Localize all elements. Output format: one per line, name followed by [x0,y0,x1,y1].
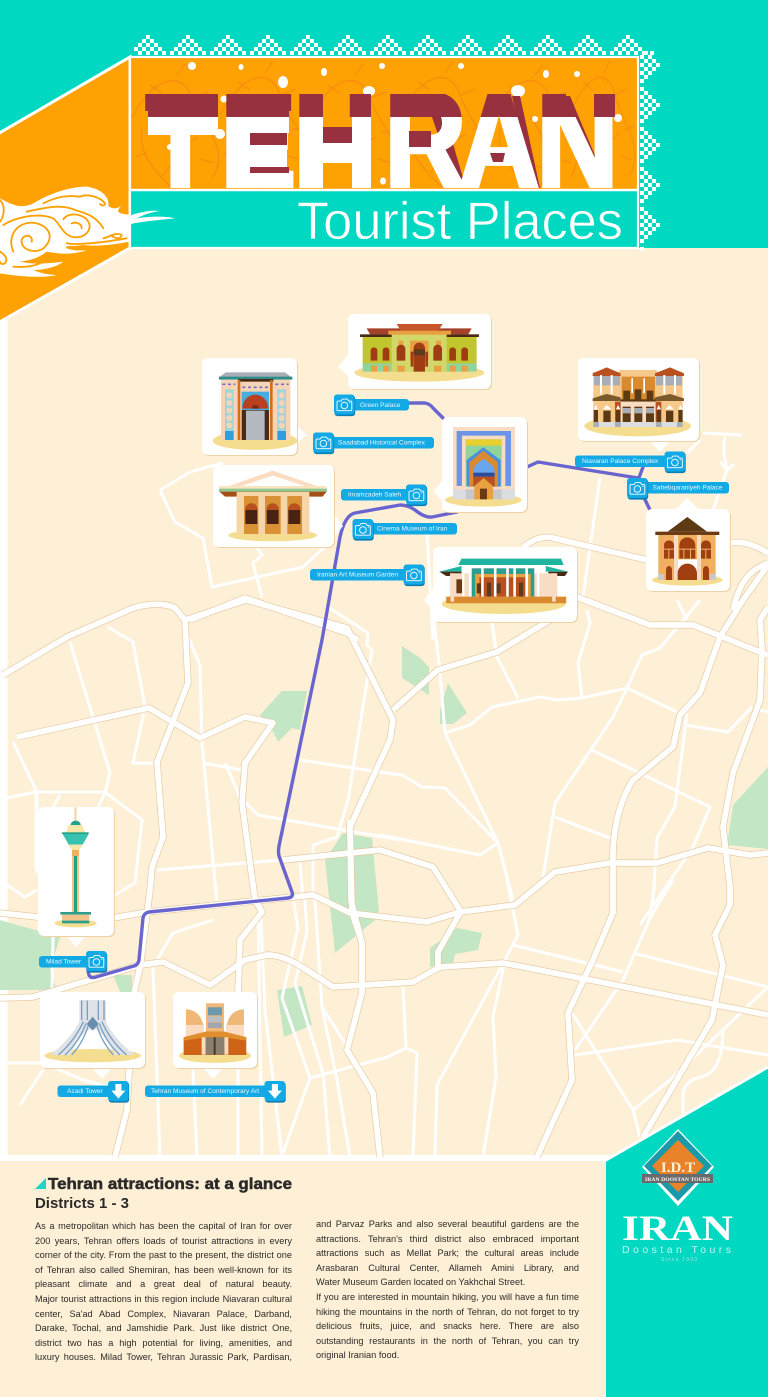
logo: Iran Doostan Tours: Since 1990 [661,1257,697,1263]
label: Milad Tower [39,951,107,973]
body text: left column: of Tehran also called Shemiran, has been well-known for its [35,1265,292,1275]
icon: Milad Tower [55,807,97,927]
footer logo panel [600,1067,768,1397]
map: main roads [0,537,768,1157]
body text: right column: hiking the mountains in the north of Tehran, do not forget to try [316,1307,579,1317]
background teal header [0,0,768,248]
body text: right column: attractions. Tehran's third district also embraced important [316,1234,579,1244]
dark extrusion bands [148,94,615,188]
teal subtitle band [131,191,637,248]
body text: left column: district two has a high potential for living, amenities, and [35,1338,292,1348]
label: Niavaran Palace Complex: Niavaran Palace Complex [582,458,659,465]
body text: left column: corner of the city. From the past to the present, the district one [35,1250,292,1260]
heading: Tehran attractions: Tehran attractions: at a glance [48,1176,292,1193]
icon: Sahebqaraniyeh building [652,517,723,586]
subheading: Districts: Districts 1 - 3 [35,1196,129,1212]
title: TEHRAN [145,94,615,188]
icon: Cinema Museum building [219,471,327,541]
map: green parks [0,646,768,1037]
title: TEHRAN: TEHRAN [146,64,618,217]
body text: right column [316,1219,579,1360]
body text: right column: delicious fruits, juice, and snacks here. There are also [316,1321,579,1331]
card: Cinema Museum [213,465,343,548]
label: Iranian Art Museum Garden [310,564,425,586]
body text: left column: Major tourist attractions in this region include Niavaran cultural [35,1294,292,1304]
body text: right column: outstanding restaurants in the north of Tehran, you can try [316,1336,579,1346]
logo: Iran Doostan Tours [622,1129,733,1263]
card: Tehran Museum of Contemporary Art [173,992,258,1079]
white specks [167,62,622,184]
card: Imamzadeh Saleh [433,417,528,513]
card: Sahebqaraniyeh Palace [646,498,731,592]
body text: right column: original Iranian food. [316,1350,399,1360]
label: Saadabad Historical Complex [313,432,434,454]
card: Saadabad [202,358,307,456]
dark counters [250,127,505,173]
body text: left column: As a metropolitan which has been the capital of Iran for over [35,1221,292,1231]
subtitle: Tourist Places [297,192,623,251]
icon: Iranian Art Museum building [439,559,568,614]
body text: left column: center, Sa'ad Abad Complex, Niavaran Palace, Darband, [35,1309,292,1319]
body text: left column: 200 years, Tehran offers loads of tourist attractions in every [35,1236,292,1246]
body text: right column: Water Museum Garden located on Yakhchal Street. [316,1277,525,1287]
label: Imamzadeh Saleh: Imamzadeh Saleh [348,492,401,498]
logo: Iran Doostan Tours: IRAN [622,1208,733,1248]
vine pattern [132,61,635,193]
label: Sahebqaraniyeh Palace: Sahebqaraniyeh Palace [652,484,723,492]
orange cut-outs in letters [323,117,352,188]
card: Green Palace [338,314,492,390]
icon: Imamzadeh building [445,427,522,507]
logo: Iran Doostan Tours: IRAN DOOSTAN TOURS [645,1177,710,1183]
label: Azadi Tower: Azadi Tower [67,1088,104,1095]
label: Azadi Tower [58,1081,129,1103]
body text: left column [35,1221,292,1362]
white letter bars [148,117,371,188]
label: Saadabad Historical Complex: Saadabad Historical Complex [338,440,426,446]
label: Cinema Museum of Iran [352,519,457,541]
label: Iranian Art Museum Garden: Iranian Art Museum Garden [317,572,398,578]
title: TEHRAN: TEHRAN [146,64,618,217]
header: checker border [134,35,660,251]
label: Tehran Museum of Contemporary Art: Tehran Museum of Contemporary Art [151,1088,259,1095]
icon: Saadabad building [213,372,297,450]
body text: right column: Arasbaran Cultural Center, Allameh Amini Library, and [316,1263,579,1273]
body text: right column: If you are interested in mountain hiking, you will have a fun time [316,1292,579,1302]
label: Green Palace [334,394,409,416]
body text: left column: pleasant climate and a great deal of natural beauty. [35,1279,292,1289]
body text: left column: Darake, Tochal, and Jamshidie Park. Just like district One, [35,1323,292,1333]
icon: Museum of Contemporary Art [179,1003,251,1063]
body text: right column: attractions such as Mellat Park; the cultural areas include [316,1248,579,1258]
label: Milad Tower: Milad Tower [46,958,82,966]
card: Milad Tower [38,807,115,947]
label: Tehran Museum of Contemporary Art [145,1081,286,1103]
map panel [0,248,768,1161]
header: orange side banner [0,57,130,324]
icon: Azadi Tower [44,1000,141,1062]
label: Cinema Museum of Iran: Cinema Museum of Iran [377,526,448,532]
card: Azadi Tower [40,992,146,1079]
body text: right column: and Parvaz Parks and also several beautiful gardens are the [316,1219,579,1229]
route line [88,403,650,978]
icon: Niavaran building [584,367,691,436]
label: Green Palace: Green Palace [360,402,401,409]
logo: Iran Doostan Tours: I.D.T [661,1160,695,1176]
card: Niavaran Palace [578,358,700,452]
card: Iranian Art Museum Garden [424,547,578,623]
body text: left column: luxury houses. Milad Tower, Tehran Jurassic Park, Pardisan, [35,1352,292,1362]
icon: Green Palace building [354,324,484,382]
label: Niavaran Palace Complex [575,452,686,473]
map: minor streets [7,433,768,1157]
title panel [130,57,638,248]
logo: Iran Doostan Tours: Doostan Tours [622,1244,731,1256]
ornament: white swirl [0,187,175,277]
label: Imamzadeh Saleh [341,484,427,506]
label: Sahebqaraniyeh Palace [627,478,729,500]
